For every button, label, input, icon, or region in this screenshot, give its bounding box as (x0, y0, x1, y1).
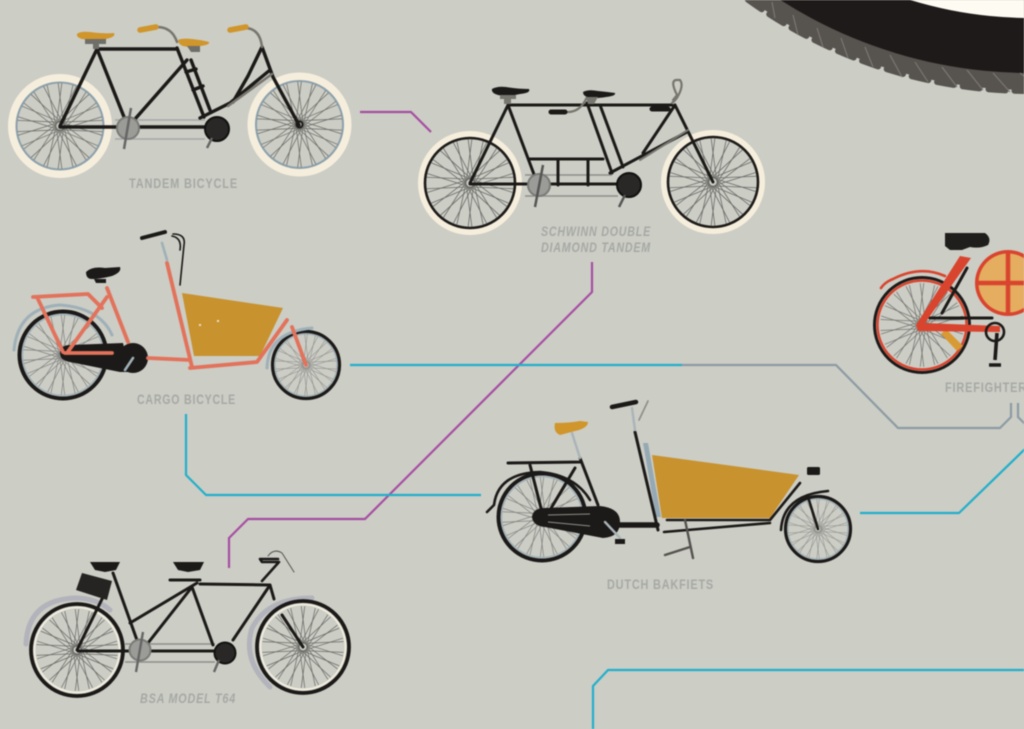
cyan connector: cargo bicycle to Dutch bakfiets (186, 414, 481, 495)
cargo box (182, 293, 283, 356)
chains (525, 175, 618, 196)
rear wheel (874, 278, 970, 372)
orange grips (140, 27, 246, 30)
red frame (916, 256, 1000, 332)
orange strip (941, 329, 963, 351)
chain case highlights (548, 514, 590, 526)
red mudguard (881, 271, 945, 288)
frame (77, 573, 303, 651)
grey stays (640, 130, 688, 160)
orange saddle (555, 421, 588, 435)
frame (60, 47, 299, 127)
cargo box (652, 455, 799, 518)
cyan connector: Dutch bakfiets to right (860, 449, 1024, 513)
cables (172, 234, 184, 285)
cyan connector: cargo bicycle to right (350, 364, 682, 366)
connector lines (186, 112, 1024, 729)
grey stem (125, 243, 167, 370)
label: SCHWINN DOUBLE (541, 224, 651, 239)
lamp (807, 467, 820, 475)
front wheel (786, 496, 850, 562)
saddle posts (500, 95, 598, 104)
grey connector: to firefighter (682, 365, 1011, 428)
bike: BSA model T64 (26, 551, 349, 706)
handlebars (566, 80, 682, 112)
rear wheel (31, 604, 123, 696)
thick frame tube (620, 522, 657, 528)
bike: firefighter (874, 233, 1024, 395)
handlebars (157, 27, 262, 47)
brake cables (639, 401, 648, 420)
label: TANDEM BICYCLE (129, 176, 238, 191)
cranks (130, 640, 150, 660)
mudguards (487, 472, 828, 530)
grey mudguards (26, 598, 312, 687)
chain ring (118, 343, 148, 373)
mudguards (14, 305, 312, 368)
cranks and pedals (528, 174, 550, 196)
magenta connector: tandem to Schwinn (360, 112, 431, 132)
black grips (551, 109, 668, 112)
label: DUTCH BAKFIETS (607, 577, 714, 592)
drop handlebar (260, 559, 279, 581)
label: CARGO BICYCLE (137, 392, 236, 407)
crank and pedal (989, 333, 1001, 365)
bike: Dutch bakfiets (487, 401, 850, 592)
saddle posts (85, 39, 200, 52)
grey connector: firefighter stub (1018, 403, 1024, 424)
handlebar (142, 232, 165, 238)
grey stays (228, 74, 272, 106)
black saddles (492, 87, 615, 98)
chains (125, 644, 215, 662)
chain case (60, 343, 130, 372)
black saddle (945, 233, 989, 250)
bike: cargo bicycle (14, 232, 340, 407)
bike: tandem bicycle (12, 27, 347, 191)
cyan connector: bottom (593, 670, 1024, 729)
giant tire at top right (549, 0, 1024, 92)
black saddle (86, 267, 120, 283)
light blue panel (643, 443, 661, 517)
lower tubes (664, 483, 818, 532)
frame (508, 432, 658, 530)
brake cable (268, 551, 294, 572)
black saddles (90, 562, 204, 572)
cranks and pedals (117, 117, 139, 139)
label: BSA MODEL T64 (140, 691, 236, 706)
orange saddles (77, 32, 209, 47)
round emblem (975, 250, 1024, 316)
box rivets (199, 320, 219, 326)
pedal (615, 539, 625, 544)
magenta connector: Schwinn to BSA (229, 262, 592, 568)
chain case (532, 506, 620, 538)
kickstand (665, 520, 693, 558)
frame (470, 103, 713, 185)
seat post and stem (572, 408, 635, 538)
saddlebag (76, 573, 112, 600)
front wheel (665, 134, 761, 230)
black tube (930, 268, 992, 318)
bike: Schwinn double diamond tandem (422, 80, 761, 255)
rear wheel (20, 312, 106, 398)
front wheel (252, 77, 347, 172)
chainring (986, 323, 1004, 341)
front wheel (272, 332, 340, 398)
rear wheel (12, 78, 108, 174)
label line two: DIAMOND TANDEM (541, 240, 651, 255)
frame (33, 263, 306, 368)
chains (115, 120, 205, 139)
handlebar (612, 402, 636, 407)
rear wheel (498, 474, 586, 560)
rear wheel (422, 135, 518, 231)
front wheel (257, 601, 349, 693)
